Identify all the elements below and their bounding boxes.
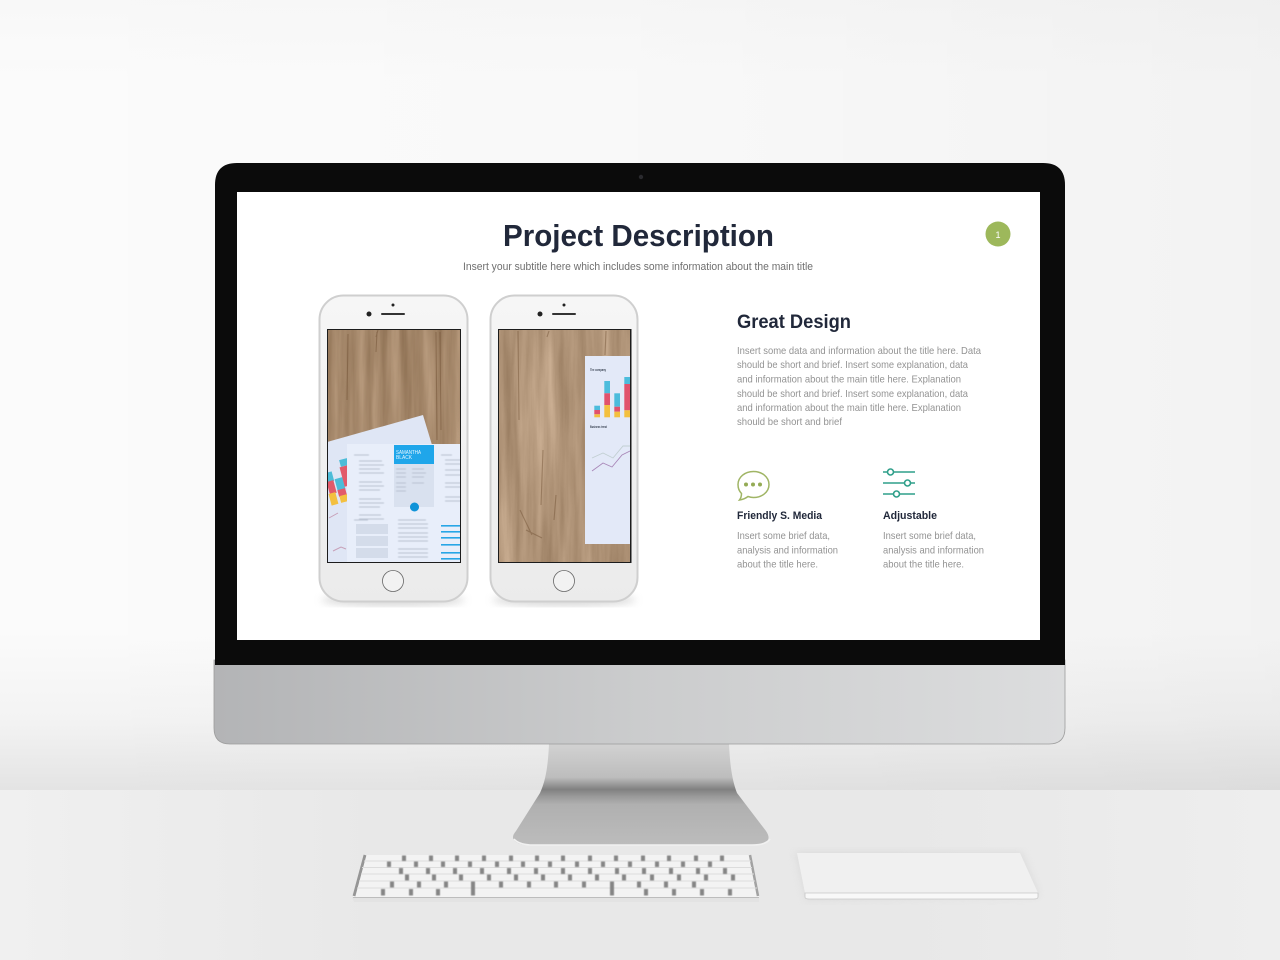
phone 2 speaker and camera (538, 304, 576, 316)
monitor (214, 163, 1065, 744)
phone 1 screen (325, 329, 461, 563)
resume text lines (354, 455, 461, 557)
line chart title: Business trend (590, 424, 607, 429)
feature text: analysis and information (883, 544, 984, 556)
section paragraph: should be short and brief (737, 416, 842, 428)
feature text (883, 530, 984, 570)
back paper (328, 415, 432, 562)
resume skill bars (441, 525, 461, 560)
keyboard body (353, 855, 759, 897)
phone 1 (320, 296, 468, 606)
phone 1 speaker and camera (366, 304, 405, 316)
chart title: The company (590, 367, 606, 372)
resume gray boxes (356, 524, 388, 558)
phone 1 body (320, 296, 468, 602)
back paper line chart (329, 513, 346, 551)
section paragraph: should be short and brief. Insert some explanation, data (737, 359, 968, 371)
feature text: about the title here. (737, 558, 818, 570)
feature text: Insert some brief data, (883, 530, 976, 542)
section paragraph (737, 345, 981, 428)
feature text: about the title here. (883, 558, 964, 570)
page number badge (986, 222, 1010, 246)
section heading: Great Design: Great Design (737, 312, 851, 333)
page number badge: 1 (995, 230, 1001, 240)
feature text: Insert some brief data, (737, 530, 830, 542)
feature heading: Adjustable (883, 510, 937, 522)
icon: speech bubble (738, 472, 769, 500)
trackpad (795, 852, 1040, 900)
resume blue dot (410, 502, 419, 512)
trackpad shadow (795, 852, 1040, 900)
phone 2 body (490, 296, 638, 602)
section paragraph: and information about the main title here. Explanation (737, 402, 961, 414)
phone 1 home button (382, 570, 404, 592)
feature: Friendly S. Media (737, 510, 838, 570)
resume blue header (394, 445, 434, 464)
trackpad top (797, 853, 1038, 893)
stacked bar chart (594, 377, 630, 417)
phone 2 home button (554, 570, 574, 592)
phone 1 screen: BLACK (396, 455, 413, 461)
line chart (592, 446, 630, 471)
section paragraph: should be short and brief. Insert some explanation, data (737, 388, 968, 400)
feature heading: Friendly S. Media (737, 510, 823, 522)
subtitle: Insert your subtitle here which includes some information about the main title (463, 261, 813, 273)
wood texture (499, 330, 630, 562)
phone 2 screen (498, 329, 632, 563)
background: desk (0, 790, 1280, 960)
resume name: SAMANTHA (396, 450, 422, 456)
trackpad edge (805, 893, 1038, 899)
section paragraph: Insert some data and information about the title here. Data (737, 345, 981, 357)
front resume paper (347, 444, 461, 563)
monitor stand (513, 744, 770, 845)
icon: sliders (883, 469, 915, 497)
section paragraph: and information about the main title here. Explanation (737, 374, 961, 386)
slide screen (237, 192, 1040, 640)
keyboard (352, 855, 759, 902)
resume gray panel (394, 464, 434, 507)
webcam (639, 175, 643, 179)
feature text (737, 530, 838, 570)
chart paper (585, 356, 631, 544)
key gaps (357, 861, 757, 888)
feature text: analysis and information (737, 544, 838, 556)
monitor chin (214, 660, 1065, 744)
phone 1 shadow (321, 594, 465, 606)
feature: Adjustable (883, 510, 984, 570)
bar chart on back paper (328, 458, 347, 506)
phone 2 (490, 296, 638, 606)
wood texture (328, 330, 460, 444)
phone 2 shadow (492, 594, 636, 606)
monitor bezel (215, 163, 1065, 665)
title: Project Description (503, 218, 774, 253)
